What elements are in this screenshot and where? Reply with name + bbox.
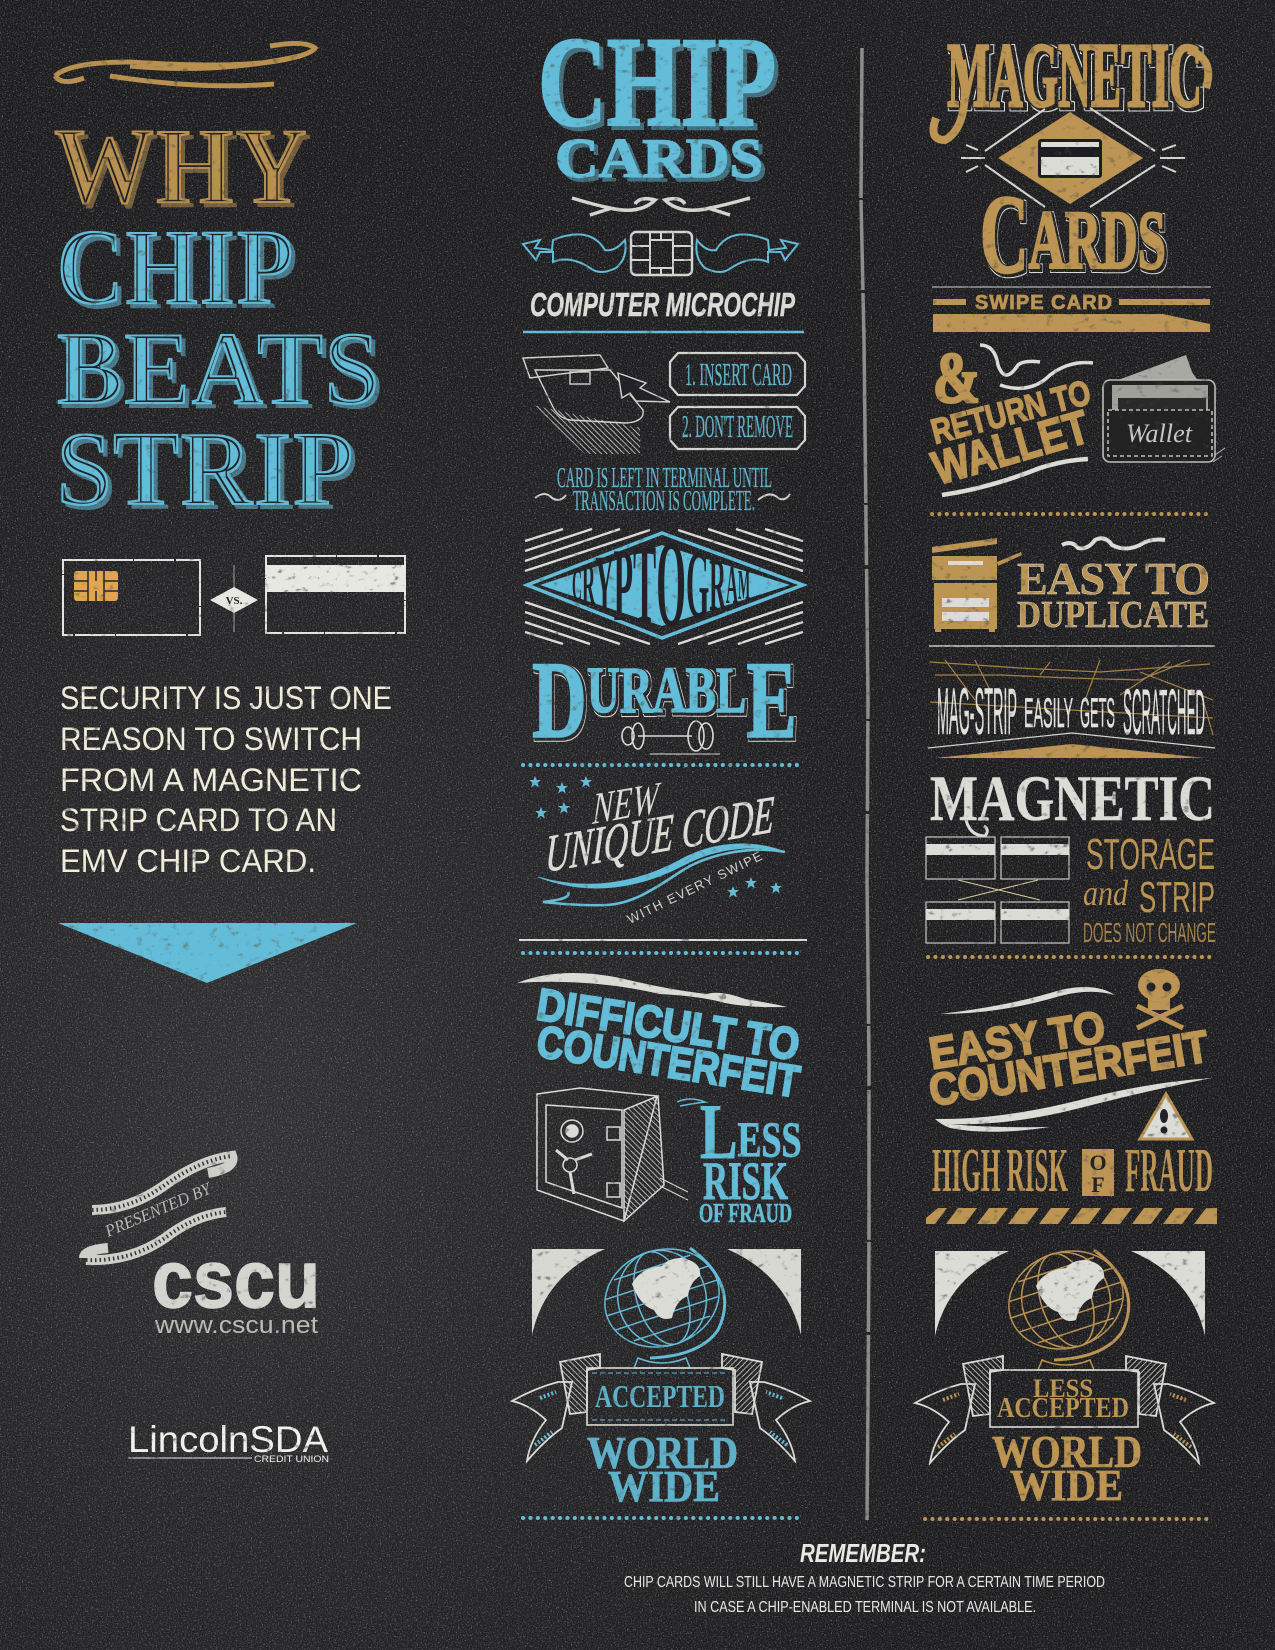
text: high risk of fraud: O [1089,1150,1107,1175]
hazard stripes [926,1208,1217,1224]
title: why chip beats strip [53,105,380,529]
badge: cryptogram: R [709,544,726,626]
left column [53,43,405,1465]
headline: easy to counterfeit: COUNTERFEIT [925,1020,1212,1116]
icon: microchip with ribbons [523,232,798,275]
title word: beats: BEATS [56,310,380,427]
banner: accepted: ACCEPTED [595,1378,725,1414]
headline: and return to wallet: RETURN TO [927,373,1095,452]
icon: versus diamond: VS. [226,595,243,607]
banner: less accepted: LESS [1033,1374,1093,1403]
headline: new unique code [529,771,785,927]
illustration: safe [537,1088,688,1221]
scratches [930,660,1213,735]
icon: skull and crossbones [1137,969,1183,1028]
banner: less accepted: ACCEPTED [997,1393,1129,1424]
badge: cryptogram: T [633,523,656,648]
text: high risk of fraud: F [1091,1172,1105,1197]
chalkboard infographic canvas: 2. DON'T REMOVE [682,408,793,444]
presented by ribbon: PRESENTED BY [101,1178,215,1241]
text: mag-strip easily gets scratched: EASILY [1024,689,1073,736]
heading: durable: D [532,640,587,761]
illustration: wallet: Wallet [1126,419,1193,448]
icon: four strip cards [926,837,1069,943]
heading: easy to duplicate [1017,553,1210,636]
badge: cryptogram: O [656,515,686,653]
headline: less risk of fraud: OF FRAUD [699,1198,792,1228]
step: don't remove [670,407,805,449]
headline: easy to counterfeit: EASY TO [926,1001,1108,1079]
logo: lincoln sda: CREDIT UNION [254,1454,329,1465]
icon: warning triangle [1140,1094,1192,1139]
intro text: EMV CHIP CARD. [60,843,316,879]
text: storage and strip does not change: and [1083,873,1129,913]
step: insert card [670,353,805,395]
icon: chip card [63,560,200,635]
intro text: STRIP CARD TO AN [60,802,337,838]
illustration: card in terminal [523,355,670,454]
step: insert card: 1. INSERT CARD [685,356,792,392]
headline: easy to counterfeit [925,987,1212,1132]
heading: cards: C [980,173,1029,296]
headline: less risk of fraud: L [700,1088,737,1175]
panel: chip cards [512,11,810,1518]
illustration: blue globe [592,1234,732,1368]
text: terminal note [535,463,790,517]
headline: and return to wallet: & [933,338,980,418]
corner shapes [935,1251,1205,1336]
headline: new unique code: UNIQUE CODE [545,785,775,884]
text: terminal note: TRANSACTION IS COMPLETE. [573,486,755,517]
heading: chip cards [538,11,776,190]
logo: lincoln sda: LincolnSDA [128,1419,328,1460]
text: reminder body: CHIP CARDS WILL STILL HAVE A MAGNETIC STRIP FOR A CERTAIN TIME PERIOD [624,1574,1105,1591]
label: computer microchip: COMPUTER MICROCHIP [530,286,796,323]
text: terminal note: CARD IS LEFT IN TERMINAL UNTIL [557,463,772,494]
badge: cryptogram: Y [595,539,614,631]
illustration: wallet [1103,355,1225,462]
badge: cryptogram: A [726,554,738,615]
headline: new unique code: WITH EVERY SWIPE [625,848,765,927]
title word: why: WHY [53,105,308,227]
flourish under heading [572,198,750,215]
flourish above title [55,43,315,86]
badge: cryptogram: C [572,561,582,611]
headline: and return to wallet: WALLET [926,399,1095,495]
heading: chip cards: CHIP [538,11,776,153]
label: swipe card [933,292,1210,332]
heading: chip cards: CARDS [555,128,763,190]
intro text: REASON TO SWITCH [60,721,362,757]
corner shapes [532,1249,801,1335]
heading: world wide: WIDE [1010,1461,1123,1510]
headline: less risk of fraud [677,1088,801,1228]
headline: new unique code: NEW [591,771,662,834]
text: high risk of fraud: HIGH RISK [932,1137,1068,1205]
badge: cryptogram: R [582,551,596,619]
banner: less accepted [915,1356,1214,1463]
label: swipe card: SWIPE CARD [975,292,1112,314]
headline: and return to wallet [926,338,1095,495]
reminder note [624,1538,1105,1616]
illustration: gold globe [996,1236,1136,1370]
headline: difficult to counterfeit [517,973,803,1107]
flourish above easy to duplicate [1062,538,1165,548]
badge: cryptogram: G [686,529,709,639]
arrow: blue triangle [58,923,357,983]
headline: difficult to counterfeit: DIFFICULT TO [533,979,803,1070]
heading: remember: REMEMBER: [800,1538,926,1568]
text: mag-strip easily gets scratched: GETS [1080,689,1115,736]
website url: www.cscu.net [154,1312,318,1339]
heading: cards: ARDS [1029,193,1166,286]
text: storage and strip does not change: STRIP [1139,873,1215,922]
logo: cscu: cscu [152,1234,320,1325]
headline: difficult to counterfeit: COUNTERFEIT [533,1016,803,1107]
heading: durable: URABL [587,654,746,727]
heading: world wide: WORLD [587,1427,738,1478]
title word: strip: STRIP [56,410,354,529]
intro text [60,680,392,879]
badge: cryptogram: M [738,561,750,608]
banner: accepted [512,1354,810,1461]
badge: cryptogram [525,515,803,653]
presented by ribbon [84,1156,232,1260]
heading: world wide [992,1426,1142,1510]
heading: durable: E [746,640,797,761]
icon: dumbbell [622,721,720,754]
heading: easy to duplicate: EASY TO [1017,553,1210,604]
headline: less risk of fraud: ESS [737,1112,801,1167]
panel: magnetic cards [915,24,1225,1519]
column divider [861,48,869,1520]
badge: cryptogram: P [614,527,633,643]
text: reminder body: IN CASE A CHIP-ENABLED TERMINAL IS NOT AVAILABLE. [694,1599,1036,1616]
icon: versus diamond [210,565,258,632]
intro text: SECURITY IS JUST ONE [60,680,392,716]
heading: world wide: WIDE [608,1462,720,1511]
heading: easy to duplicate: DUPLICATE [1017,594,1209,636]
heading: world wide [587,1427,738,1511]
heading: world wide: WORLD [992,1426,1142,1477]
text: storage and strip does not change [1083,830,1216,948]
icon: copier [932,538,1022,632]
icon: diamond with card [961,108,1185,207]
text: reminder body [624,1574,1105,1616]
icon: magnetic strip card [266,556,405,633]
intro text: FROM A MAGNETIC [60,762,362,798]
heading: magnetic [933,24,1208,140]
headline: less risk of fraud: RISK [703,1151,788,1211]
title word: chip: CHIP [56,206,294,328]
